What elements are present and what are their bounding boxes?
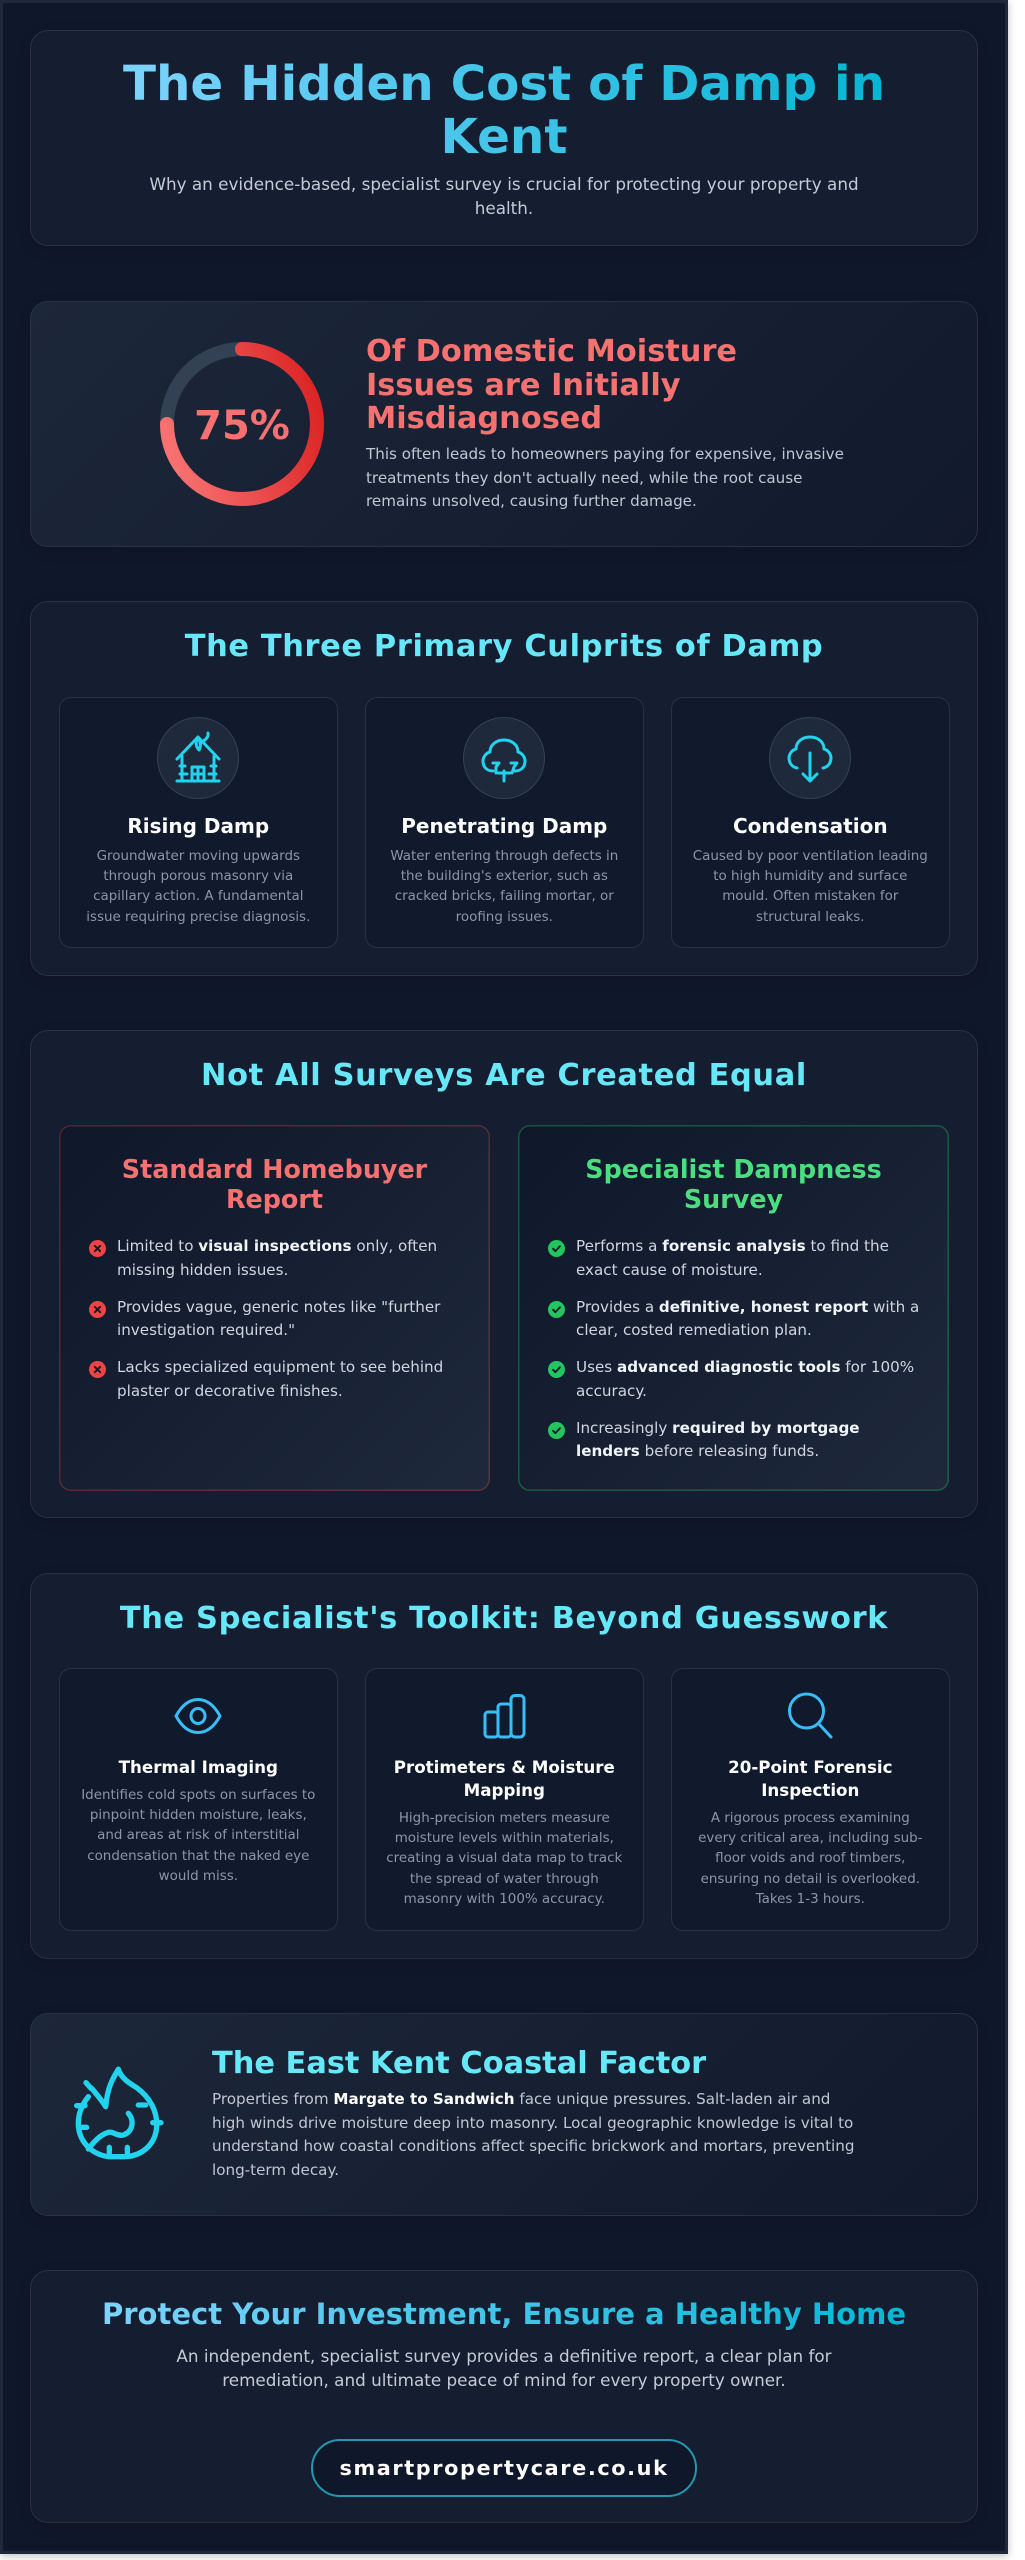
text	[576, 1298, 919, 1339]
card description: High-precision meters measure	[399, 1811, 610, 1826]
card description: the spread of water through	[410, 1872, 599, 1887]
heading: The Specialist's Toolkit: Beyond Guesswork	[120, 1600, 888, 1636]
card: condensation	[671, 697, 950, 948]
icon: eye	[174, 1698, 222, 1734]
text	[576, 1358, 914, 1400]
card description: Water entering through defects in	[390, 849, 618, 864]
card description: and areas at risk of interstitial	[97, 1828, 299, 1843]
subtitle: health.	[475, 198, 533, 218]
card description: Takes 1-3 hours.	[756, 1892, 865, 1907]
icon: cross	[89, 1361, 106, 1378]
text: Provides a definitive, honest report with a	[576, 1298, 919, 1316]
statistic heading: Issues are Initially	[366, 368, 681, 403]
list item	[89, 1358, 443, 1400]
card description: floor voids and roof timbers,	[715, 1851, 905, 1866]
icon: check	[548, 1361, 565, 1378]
card: penetrating damp	[365, 697, 644, 948]
card title	[728, 1756, 892, 1800]
icon: magnifying glass	[788, 1692, 833, 1739]
text: plaster or decorative finishes.	[117, 1382, 343, 1400]
text: exact cause of moisture.	[576, 1260, 763, 1278]
column heading: Standard Homebuyer	[122, 1154, 427, 1184]
text: Provides vague, generic notes like "further	[117, 1298, 440, 1316]
text	[117, 1298, 440, 1339]
text: Limited to visual inspections only, often	[117, 1237, 437, 1255]
statistic description: remains unsolved, causing further damage.	[366, 492, 697, 510]
icon: coastal flame and gears	[74, 2066, 164, 2160]
column heading	[585, 1154, 882, 1214]
card title: Thermal Imaging	[119, 1756, 278, 1776]
list item	[548, 1418, 860, 1460]
column heading: Specialist Dampness	[585, 1154, 882, 1184]
icon: cloud leak	[463, 717, 545, 799]
card description: roofing issues.	[456, 910, 553, 925]
card: thermal imaging	[59, 1668, 338, 1931]
panel: survey comparison	[30, 1030, 978, 1518]
description: long-term decay.	[212, 2161, 339, 2179]
card description: A rigorous process examining	[711, 1811, 910, 1826]
icon: cross	[89, 1240, 106, 1257]
heading: The East Kent Coastal Factor	[212, 2046, 706, 2080]
card description: Groundwater moving upwards	[97, 849, 300, 864]
card description: issue requiring precise diagnosis.	[86, 910, 310, 925]
panel: 75% statistic	[30, 301, 978, 547]
card description: Identifies cold spots on surfaces to	[81, 1788, 315, 1803]
text	[576, 1418, 860, 1460]
statistic description: This often leads to homeowners paying for expensive, invasive	[366, 445, 844, 463]
card description: creating a visual data map to track	[386, 1851, 622, 1866]
card description: condensation that the naked eye	[87, 1849, 309, 1864]
heading: Not All Surveys Are Created Equal	[201, 1058, 807, 1093]
title: Kent	[440, 108, 568, 164]
card title: Mapping	[464, 1780, 545, 1800]
card description: would miss.	[159, 1869, 238, 1884]
icon: check	[548, 1301, 565, 1318]
card description: every critical area, including sub-	[698, 1831, 922, 1846]
card description: to high humidity and surface	[713, 869, 907, 884]
button: website: smartpropertycare.co.uk	[339, 2456, 669, 2480]
title	[123, 56, 885, 164]
text: lenders before releasing funds.	[576, 1442, 819, 1460]
card description: Caused by poor ventilation leading	[693, 849, 928, 864]
list item	[548, 1358, 914, 1400]
icon: check	[548, 1240, 565, 1257]
column: standard homebuyer report	[59, 1125, 490, 1491]
statistic description: treatments they don't actually need, while the root cause	[366, 469, 802, 487]
card: protimeters	[365, 1668, 644, 1931]
panel: coastal factor	[30, 2013, 978, 2216]
list item	[548, 1298, 919, 1339]
panel: specialist toolkit	[30, 1573, 978, 1959]
icon: bar chart	[484, 1694, 526, 1738]
card title: Protimeters & Moisture	[394, 1756, 615, 1776]
list item	[548, 1237, 889, 1278]
panel: call to action	[30, 2270, 978, 2523]
card description	[81, 1788, 315, 1884]
card title: Penetrating Damp	[401, 814, 607, 838]
column heading: Report	[226, 1184, 323, 1214]
icon: house	[157, 717, 239, 799]
text: clear, costed remediation plan.	[576, 1321, 812, 1339]
panel: header	[30, 30, 978, 246]
card description	[86, 849, 310, 925]
text: Increasingly required by mortgage	[576, 1418, 860, 1436]
card description	[698, 1811, 922, 1907]
statistic description	[366, 445, 844, 510]
card title	[394, 1756, 615, 1800]
icon: cloud with down arrow	[769, 717, 851, 799]
card description	[390, 849, 618, 925]
subtitle: Why an evidence-based, specialist survey is crucial for protecting your property and	[149, 174, 859, 194]
title: The Hidden Cost of Damp in	[123, 56, 885, 112]
card: forensic inspection	[671, 1668, 950, 1931]
card title: Inspection	[761, 1780, 859, 1800]
statistic heading	[366, 334, 737, 436]
card description: mould. Often mistaken for	[722, 889, 898, 904]
card: rising damp	[59, 697, 338, 948]
statistic heading: Misdiagnosed	[366, 401, 602, 436]
card title: Rising Damp	[127, 814, 269, 838]
card title: 20-Point Forensic	[728, 1756, 892, 1776]
text: Uses advanced diagnostic tools for 100%	[576, 1358, 914, 1376]
description: understand how coastal conditions affect specific brickwork and mortars, preventing	[212, 2137, 854, 2155]
card description: moisture levels within materials,	[395, 1831, 614, 1846]
text	[117, 1237, 437, 1278]
card description	[386, 1811, 622, 1907]
description: remediation, and ultimate peace of mind for every property owner.	[222, 2370, 786, 2390]
list item	[89, 1237, 437, 1278]
icon: check	[548, 1422, 565, 1439]
description	[212, 2088, 854, 2182]
column: specialist dampness survey	[518, 1125, 949, 1491]
statistic heading: Of Domestic Moisture	[366, 334, 737, 369]
text: accuracy.	[576, 1382, 647, 1400]
card description: masonry with 100% accuracy.	[404, 1892, 605, 1907]
heading: The Three Primary Culprits of Damp	[185, 628, 823, 664]
text: investigation required."	[117, 1321, 295, 1339]
text: Performs a forensic analysis to find the	[576, 1237, 889, 1255]
donut chart: 75%: 75%	[194, 403, 290, 449]
card title: Condensation	[733, 814, 888, 838]
card description: through porous masonry via	[103, 869, 293, 884]
icon: cross	[89, 1301, 106, 1318]
column heading: Survey	[684, 1184, 783, 1214]
card description: the building's exterior, such as	[401, 869, 608, 884]
description: An independent, specialist survey provides a definitive report, a clear plan for	[176, 2346, 832, 2366]
button: website	[311, 2439, 697, 2497]
text: Lacks specialized equipment to see behind	[117, 1358, 443, 1376]
description: Properties from Margate to Sandwich face unique pressures. Salt-laden air and	[212, 2090, 830, 2108]
card description: ensuring no detail is overlooked.	[701, 1872, 920, 1887]
card description: cracked bricks, failing mortar, or	[395, 889, 614, 904]
subtitle	[149, 174, 859, 218]
card description	[693, 849, 928, 925]
panel: three culprits	[30, 601, 978, 976]
column heading	[122, 1154, 428, 1214]
description	[30, 2345, 978, 2392]
donut chart: 75%	[160, 342, 324, 506]
text	[117, 1358, 443, 1400]
list item	[89, 1298, 440, 1339]
heading: Protect Your Investment, Ensure a Healthy Home	[102, 2297, 906, 2331]
description: high winds drive moisture deep into masonry. Local geographic knowledge is vital to	[212, 2114, 853, 2132]
text	[576, 1237, 889, 1278]
text: missing hidden issues.	[117, 1260, 288, 1278]
card description: structural leaks.	[756, 910, 865, 925]
card description: pinpoint hidden moisture, leaks,	[90, 1808, 307, 1823]
card description: capillary action. A fundamental	[93, 889, 303, 904]
